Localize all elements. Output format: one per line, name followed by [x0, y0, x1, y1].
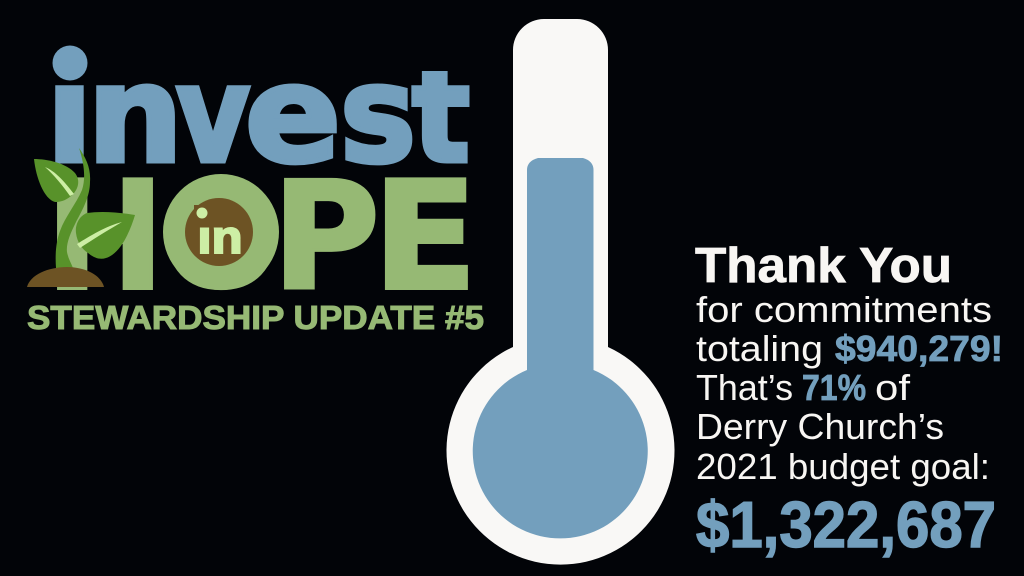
thermometer fill level — [473, 158, 648, 538]
badge: in — [185, 198, 253, 266]
heading word: HOPE: H — [46, 151, 164, 324]
line: percent of goal — [696, 367, 911, 408]
goal amount: $1,322,687 — [696, 488, 996, 561]
thermometer outline — [446, 19, 674, 565]
logo: invest in hope — [27, 37, 477, 324]
line: budget goal: 2021 budget goal: — [696, 446, 990, 487]
heading word: invest: t — [412, 37, 470, 193]
line: percent of goal: That’s — [696, 367, 793, 408]
line: derry church: Derry Church’s — [696, 406, 944, 447]
subtitle: STEWARDSHIP UPDATE #5 — [27, 299, 484, 336]
badge: in: in — [198, 211, 242, 263]
line: percent of goal: of — [875, 367, 911, 408]
line: percent of goal: 71% — [802, 367, 866, 408]
line: totaling amount: $940,279! — [835, 328, 1003, 369]
line: totaling amount — [696, 328, 1003, 369]
text block: thank you message — [695, 239, 1003, 561]
heading word: HOPE: E — [373, 151, 477, 324]
heading word: HOPE — [46, 150, 477, 324]
line: for commitments: for commitments — [696, 289, 992, 330]
line: totaling amount: totaling — [696, 328, 823, 369]
heading: thank you: Thank You — [695, 239, 952, 293]
thermometer — [446, 19, 674, 565]
heading word: invest: s — [340, 37, 416, 193]
heading word: HOPE: O — [160, 150, 282, 323]
icon: sprout — [27, 148, 135, 287]
heading word: HOPE: P — [272, 151, 380, 324]
heading word: invest: in — [46, 37, 183, 193]
heading word: invest: e — [245, 37, 341, 193]
heading word: invest: v — [176, 37, 250, 193]
heading word: invest — [45, 37, 475, 193]
